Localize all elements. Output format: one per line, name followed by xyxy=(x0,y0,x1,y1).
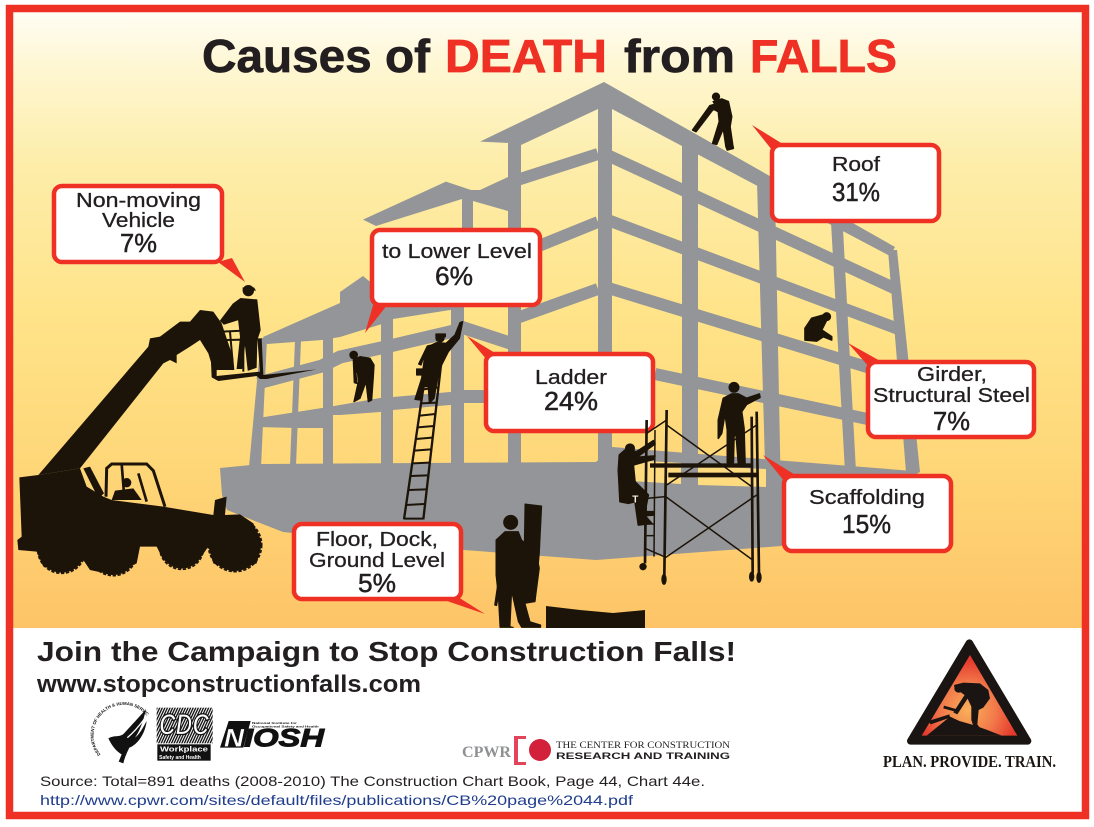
callout: non-moving vehicle xyxy=(54,186,245,282)
logo: CPWR xyxy=(462,736,730,765)
logo: CPWR: THE CENTER FOR CONSTRUCTION xyxy=(556,741,730,751)
icon: warning triangle with roofer xyxy=(911,643,1028,741)
logo: NIOSH: N xyxy=(224,725,245,753)
callout: girder, structural steel: Structural Steel xyxy=(873,385,1030,407)
callout: girder, structural steel: 7% xyxy=(933,406,970,436)
callout: floor, dock, ground level: Ground Level xyxy=(309,550,445,572)
logo: NIOSH: IOSH xyxy=(244,725,325,753)
title: Causes of xyxy=(202,30,431,82)
logo: HHS eagle: DEPARTMENT OF HEALTH & HUMAN SERVICES · USA xyxy=(90,702,148,756)
callout: roof xyxy=(752,125,939,221)
logo: NIOSH: National Institute for xyxy=(252,721,298,725)
campaign url: www.stopconstructionfalls.com xyxy=(36,671,421,698)
callout: to lower level xyxy=(365,230,540,333)
callout: floor, dock, ground level: Floor, Dock, xyxy=(316,529,438,551)
callout: floor, dock, ground level xyxy=(294,524,485,614)
logo: NIOSH: Occupational Safety and Health xyxy=(252,724,319,728)
callout: to lower level: 6% xyxy=(435,261,473,291)
background panel xyxy=(13,12,1082,628)
callout: scaffolding: 15% xyxy=(842,509,891,539)
callout: scaffolding xyxy=(763,455,951,551)
callout: ladder: 24% xyxy=(544,386,598,416)
logo: CDC workplace xyxy=(157,708,213,761)
callout: non-moving vehicle: 7% xyxy=(120,228,157,258)
telehandler xyxy=(17,285,317,576)
logo: NIOSH xyxy=(220,721,325,753)
logo: CPWR: RESEARCH AND TRAINING xyxy=(556,751,730,762)
title: from xyxy=(624,30,735,82)
campaign heading: Join the Campaign to Stop Construction Falls! xyxy=(37,636,736,667)
callout: scaffolding: Scaffolding xyxy=(809,487,925,509)
callout: to lower level: to Lower Level xyxy=(382,241,532,263)
callout: roof: Roof xyxy=(832,154,880,176)
title: DEATH xyxy=(445,30,607,82)
logo: CDC workplace: Workplace xyxy=(160,745,208,754)
worker: carrying board xyxy=(495,504,542,627)
logo: CDC workplace: CDC xyxy=(159,708,210,741)
worker: on ladder xyxy=(415,322,463,403)
worker: on scaffold platform xyxy=(718,383,760,463)
callout: ladder xyxy=(467,336,653,431)
callout: ladder: Ladder xyxy=(535,367,607,389)
worker: bending on floor xyxy=(350,351,374,402)
ladder xyxy=(404,365,441,519)
callout: roof: 31% xyxy=(832,177,880,207)
source link: http://www.cpwr.com/sites/default/files/publications/CB%20page%2044.pdf xyxy=(40,792,633,808)
lumber block xyxy=(546,606,645,628)
callout: floor, dock, ground level: 5% xyxy=(358,568,396,598)
scaffolding xyxy=(639,410,762,585)
building frame xyxy=(220,82,920,560)
callout: girder, structural steel xyxy=(848,343,1034,437)
worker: climbing scaffold xyxy=(618,441,655,525)
callout: non-moving vehicle: Vehicle xyxy=(102,210,175,232)
callout: non-moving vehicle: Non-moving xyxy=(76,190,201,212)
worker: on roof xyxy=(693,93,733,150)
worker: climbing scaffold: T xyxy=(632,495,638,506)
worker: kneeling on girder xyxy=(805,313,832,341)
title: FALLS xyxy=(750,30,897,82)
logo: CDC workplace: Safety and Health xyxy=(159,755,201,761)
source note: Source: Total=891 deaths (2008-2010) The Construction Chart Book, Page 44, Chart 44e. xyxy=(40,773,705,789)
tagline: PLAN. PROVIDE. TRAIN. xyxy=(883,752,1056,771)
logo: CPWR: CPWR xyxy=(462,744,511,761)
building lower windows xyxy=(630,460,766,487)
callout: girder, structural steel: Girder, xyxy=(917,364,987,386)
logo: HHS eagle xyxy=(90,702,148,764)
title xyxy=(202,30,897,82)
